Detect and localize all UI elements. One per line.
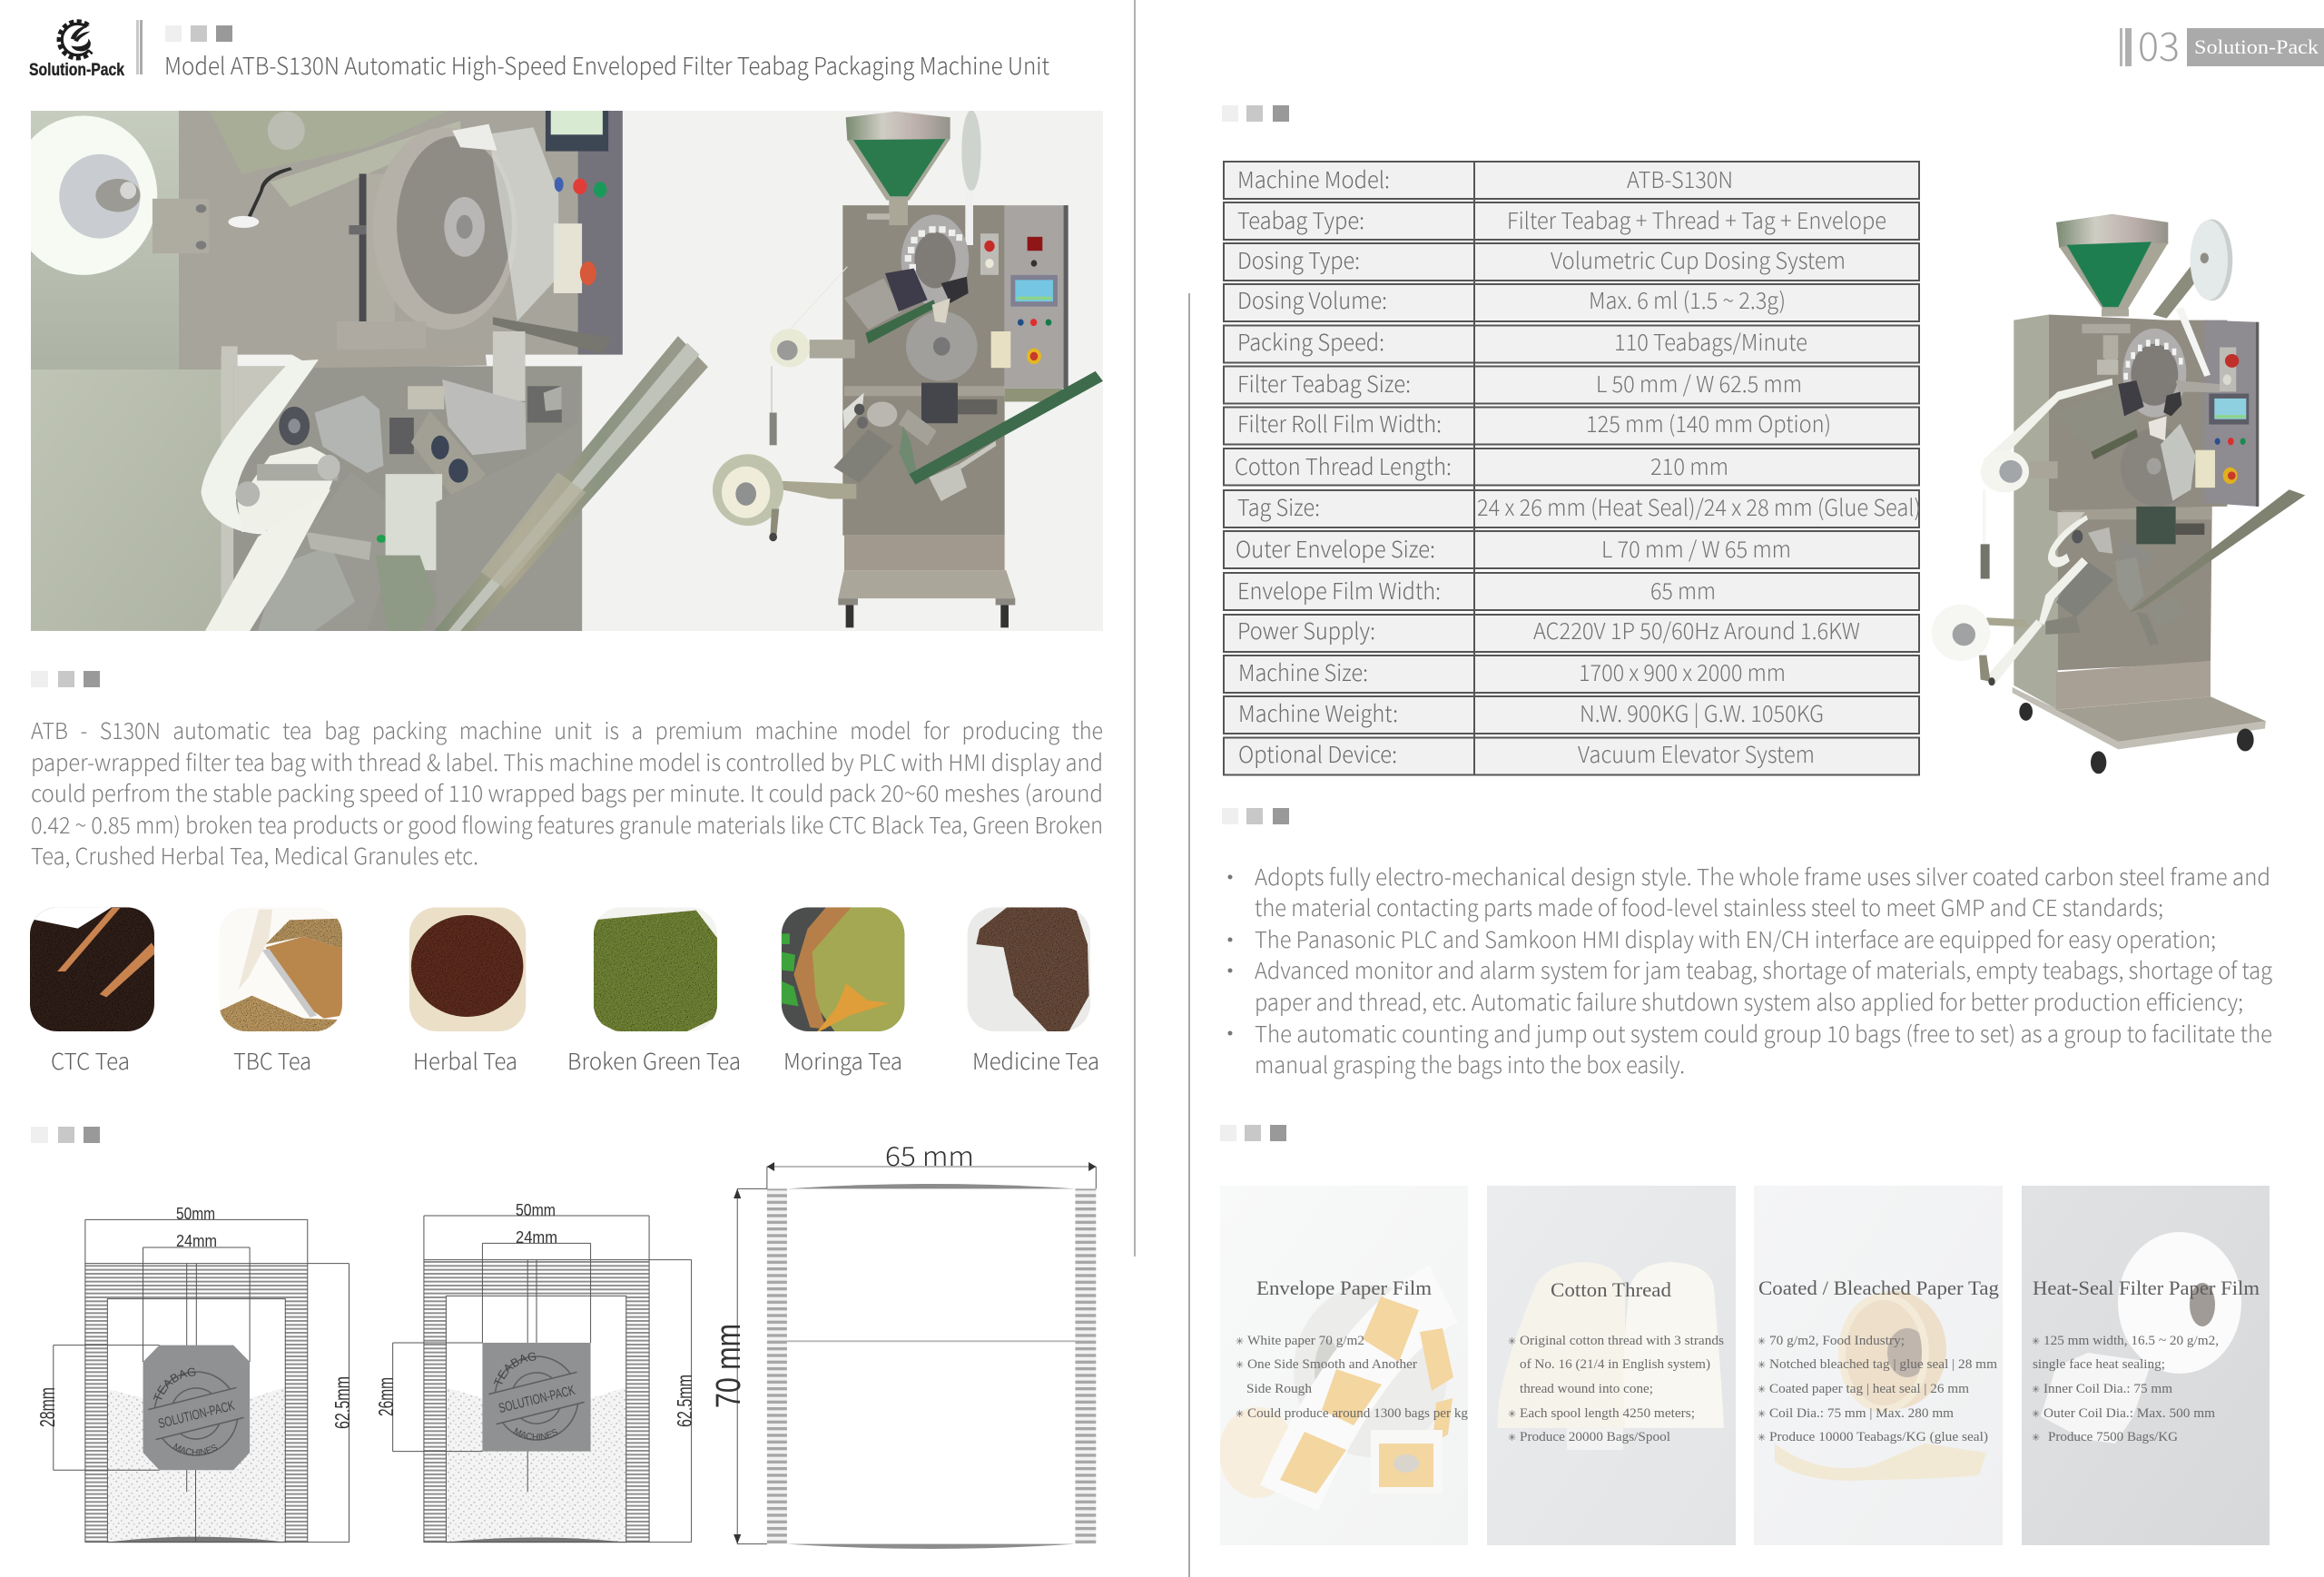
table values: Volumetric Cup Dosing System: [1551, 243, 1846, 276]
features bullet list: [1227, 860, 2272, 1080]
tag stamp: [148, 1367, 244, 1456]
table values: L 70 mm / W 65 mm: [1601, 532, 1791, 565]
card list: ✳: [1508, 1336, 1516, 1347]
description paragraph: paper-wrapped filter tea bag with thread & label. This machine model is controlled by PLC with HMI display and: [31, 745, 1103, 778]
dimension drawing: square tag teabag: [374, 1201, 696, 1543]
card list: 125 mm width, 16.5 ~ 20 g/m2,: [2043, 1334, 2219, 1348]
dimension drawing: octagonal tag teabag: [35, 1205, 354, 1543]
card list: White paper 70 g/m2: [1247, 1334, 1364, 1348]
description paragraph: 0.42 ~ 0.85 mm) broken tea products or good flowing features granule materials like CTC Black Tea, Green Broken: [31, 808, 1103, 841]
table labels: Machine Weight:: [1238, 696, 1398, 729]
tag stamp: TEABAG: [494, 1353, 536, 1384]
card list: Could produce around 1300 bags per kg: [1247, 1406, 1468, 1421]
card list: Produce 20000 Bags/Spool: [1520, 1430, 1670, 1444]
card list: Side Rough: [1246, 1382, 1312, 1396]
features bullet list: The Panasonic PLC and Samkoon HMI display with EN/CH interface are equipped for easy operation;: [1255, 922, 2216, 955]
tag stamp: TEABAG: [153, 1367, 196, 1400]
tea thumbnail: TBC: [219, 907, 344, 1033]
description paragraph: ATB - S130N automatic tea bag packing machine unit is a premium machine model for producing the: [31, 714, 1103, 746]
dimension drawing: outer envelope: [710, 1136, 1096, 1549]
table labels: Tag Size:: [1237, 490, 1320, 523]
card image: tag roll: [1754, 1186, 2003, 1545]
right page vertical rule: [1188, 293, 1190, 1577]
card: Coated / Bleached Paper Tag: Coated / Bleached Paper Tag: [1758, 1276, 1999, 1299]
table values: AC220V 1P 50/60Hz Around 1.6KW: [1533, 614, 1860, 646]
card list: ✳: [1758, 1408, 1766, 1420]
tea thumbnail: Medicine: [968, 907, 1090, 1032]
dimension drawing: outer envelope: 70 mm: [710, 1324, 748, 1408]
card list: ✳: [1758, 1432, 1766, 1444]
table values: 1700 x 900 x 2000 mm: [1579, 655, 1786, 688]
table labels: Filter Roll Film Width:: [1237, 407, 1442, 439]
table values: 125 mm (140 mm Option): [1586, 407, 1831, 439]
table values: [1477, 163, 1921, 770]
card: Cotton Thread: [1487, 1186, 1736, 1545]
tag stamp: SOLUTION-PACK: [497, 1383, 576, 1416]
section squares: description: [31, 671, 100, 687]
table values: 110 Teabags/Minute: [1614, 325, 1807, 358]
table labels: Packing Speed:: [1237, 325, 1384, 358]
tag stamp: MACHINES: [514, 1427, 557, 1440]
table labels: Optional Device:: [1238, 737, 1397, 770]
card list: ✳: [1236, 1359, 1244, 1371]
dimension drawing: square tag teabag: 26mm: [374, 1377, 398, 1416]
features bullet list: paper and thread, etc. Automatic failure shutdown system also applied for better production efficiency;: [1255, 985, 2243, 1018]
table labels: Machine Model:: [1237, 163, 1390, 195]
card list: ✳: [1508, 1408, 1516, 1420]
table labels: Dosing Type:: [1237, 243, 1360, 276]
card list: [1758, 1334, 1997, 1444]
table labels: Filter Teabag Size:: [1237, 367, 1411, 399]
card list: ✳: [1236, 1408, 1244, 1420]
dimension drawing: octagonal tag teabag: 50mm: [176, 1205, 215, 1223]
dimension drawing: octagonal tag teabag: 28mm: [35, 1387, 59, 1427]
section squares: dimensions: [31, 1127, 100, 1143]
card list: Outer Coil Dia.: Max. 500 mm: [2043, 1406, 2215, 1421]
tea labels: Broken Green Tea: [567, 1044, 741, 1077]
description paragraph: [31, 714, 1103, 872]
photo: full machine front: [713, 110, 1103, 627]
card list: [1236, 1334, 1468, 1421]
features bullet list: The automatic counting and jump out system could group 10 bags (free to set) as a group to facilitate the: [1255, 1017, 2272, 1050]
card list: of No. 16 (21/4 in English system): [1520, 1357, 1710, 1372]
features bullet list: Adopts fully electro-mechanical design style. The whole frame uses silver coated carbon steel frame and: [1255, 860, 2270, 892]
table labels: Teabag Type:: [1237, 203, 1364, 236]
tea labels: CTC Tea: [51, 1044, 130, 1077]
page tag: 03 Solution-Pack: 03: [2138, 15, 2180, 73]
card list: 70 g/m2, Food Industry;: [1769, 1334, 1905, 1348]
dimension drawing: octagonal tag teabag: 62.5mm: [330, 1376, 354, 1429]
page tag: 03 Solution-Pack: Solution-Pack: [2194, 35, 2319, 58]
tea thumbnail: Herbal: [409, 907, 526, 1031]
header squares: [165, 25, 232, 42]
card list: Inner Coil Dia.: 75 mm: [2043, 1382, 2172, 1396]
card: Coated / Bleached Paper Tag: [1754, 1186, 2003, 1545]
section squares: consumables: [1220, 1125, 1286, 1141]
dimension drawing: octagonal tag teabag: 24mm: [176, 1232, 217, 1250]
table values: ATB-S130N: [1627, 163, 1733, 195]
card list: Produce 10000 Teabags/KG (glue seal): [1769, 1430, 1988, 1444]
hero photo panel: [10, 110, 1103, 631]
card list: Each spool length 4250 meters;: [1520, 1406, 1695, 1421]
page tag: 03 Solution-Pack: [2120, 15, 2324, 73]
tag stamp: MACHINES: [173, 1444, 218, 1455]
card list: ✳: [2032, 1336, 2040, 1347]
logo: Solution-Pack: [29, 22, 124, 80]
card list: Produce 7500 Bags/KG: [2048, 1430, 2178, 1444]
card: Envelope Paper Film: Envelope Paper Film: [1256, 1276, 1432, 1299]
tea samples row: [30, 905, 1099, 1077]
table labels: Power Supply:: [1237, 614, 1375, 646]
card image: filter roll: [2022, 1186, 2270, 1545]
tag stamp: SOLUTION-PACK: [157, 1398, 236, 1432]
card list: thread wound into cone;: [1520, 1382, 1653, 1396]
card list: ✳: [2032, 1408, 2040, 1420]
table labels: Envelope Film Width:: [1237, 574, 1441, 606]
card: Heat-Seal Filter Paper Film: Heat-Seal Filter Paper Film: [2033, 1276, 2260, 1299]
table values: L 50 mm / W 62.5 mm: [1596, 367, 1802, 399]
tea labels: Herbal Tea: [413, 1044, 517, 1077]
features bullet list: the material contacting parts made of food-level stainless steel to meet GMP and CE standards;: [1255, 891, 2163, 923]
card list: single face heat sealing;: [2033, 1357, 2165, 1372]
card list: [2032, 1334, 2219, 1444]
logo: Solution-Pack: Solution-Pack: [29, 61, 124, 80]
table labels: [1235, 163, 1452, 770]
description paragraph: Tea, Crushed Herbal Tea, Medical Granules etc.: [31, 839, 478, 872]
dimension drawing: outer envelope: 65 mm: [885, 1136, 974, 1174]
specification table: [1224, 162, 1921, 775]
dimension drawing: square tag teabag: 62.5mm: [673, 1375, 696, 1427]
tag stamp: [488, 1353, 585, 1441]
dimension drawing: square tag teabag: 24mm: [516, 1228, 557, 1247]
table labels: Machine Size:: [1238, 655, 1368, 688]
table values: 24 x 26 mm (Heat Seal)/24 x 28 mm (Glue Seal): [1477, 490, 1921, 523]
dimension drawing: square tag teabag: 50mm: [516, 1201, 556, 1219]
features bullet list: manual grasping the bags into the box easily.: [1255, 1048, 1685, 1080]
table values: N.W. 900KG | G.W. 1050KG: [1580, 696, 1824, 729]
table values: 65 mm: [1650, 574, 1716, 606]
table labels: Cotton Thread Length:: [1235, 449, 1452, 482]
tea labels: Medicine Tea: [972, 1044, 1099, 1077]
card list: One Side Smooth and Another: [1247, 1357, 1417, 1372]
card list: ✳: [1508, 1432, 1516, 1444]
card list: Coated paper tag | heat seal | 26 mm: [1769, 1382, 1969, 1396]
table values: Max. 6 ml (1.5 ~ 2.3g): [1589, 283, 1786, 316]
table values: Vacuum Elevator System: [1578, 737, 1815, 770]
tea thumbnail: Broken Green: [594, 907, 717, 1032]
description paragraph: could perfrom the stable packing speed of 110 wrapped bags per minute. It could pack 20~60 meshes (around: [31, 776, 1103, 809]
card image: envelope film roll: [1219, 1186, 1468, 1545]
card list: ✳: [2032, 1384, 2040, 1395]
table labels: Outer Envelope Size:: [1236, 532, 1435, 565]
card: Heat-Seal Filter Paper Film: [2022, 1186, 2270, 1545]
photo: machine close-up: [10, 111, 708, 631]
card list: Notched bleached tag | glue seal | 28 mm: [1769, 1357, 1997, 1372]
card image: cotton cones: [1487, 1186, 1736, 1545]
table values: Filter Teabag + Thread + Tag + Envelope: [1507, 203, 1886, 236]
card: Envelope Paper Film: [1219, 1186, 1468, 1545]
card: Cotton Thread: Cotton Thread: [1551, 1278, 1671, 1301]
table values: 210 mm: [1650, 449, 1728, 482]
card list: Coil Dia.: 75 mm | Max. 280 mm: [1769, 1406, 1954, 1421]
card list: ✳: [1758, 1384, 1766, 1395]
features bullet list: Advanced monitor and alarm system for jam teabag, shortage of materials, empty teabags, shortage of tag: [1255, 953, 2272, 986]
card list: Original cotton thread with 3 strands: [1520, 1334, 1724, 1348]
header divider bar: [136, 20, 143, 74]
section squares: features: [1222, 808, 1289, 824]
section squares: specifications: [1222, 105, 1289, 122]
tea thumbnail: Moringa: [780, 907, 908, 1033]
tea labels: [51, 1044, 1099, 1077]
left page vertical rule: [1134, 0, 1136, 1257]
tea thumbnail: CTC: [30, 905, 157, 1031]
title: Model ATB-S130N Automatic High-Speed Enveloped Filter Teabag Packaging Machine Unit: [164, 48, 1049, 82]
machine photo beside table: [1932, 214, 2305, 774]
card list: ✳: [1236, 1336, 1244, 1347]
table labels: Dosing Volume:: [1237, 283, 1387, 316]
tea labels: TBC Tea: [233, 1044, 311, 1077]
card list: [1508, 1334, 1724, 1444]
card list: ✳: [1758, 1359, 1766, 1371]
tea labels: Moringa Tea: [783, 1044, 902, 1077]
card list: ✳: [1758, 1336, 1766, 1347]
card list: ✳: [2032, 1432, 2040, 1444]
